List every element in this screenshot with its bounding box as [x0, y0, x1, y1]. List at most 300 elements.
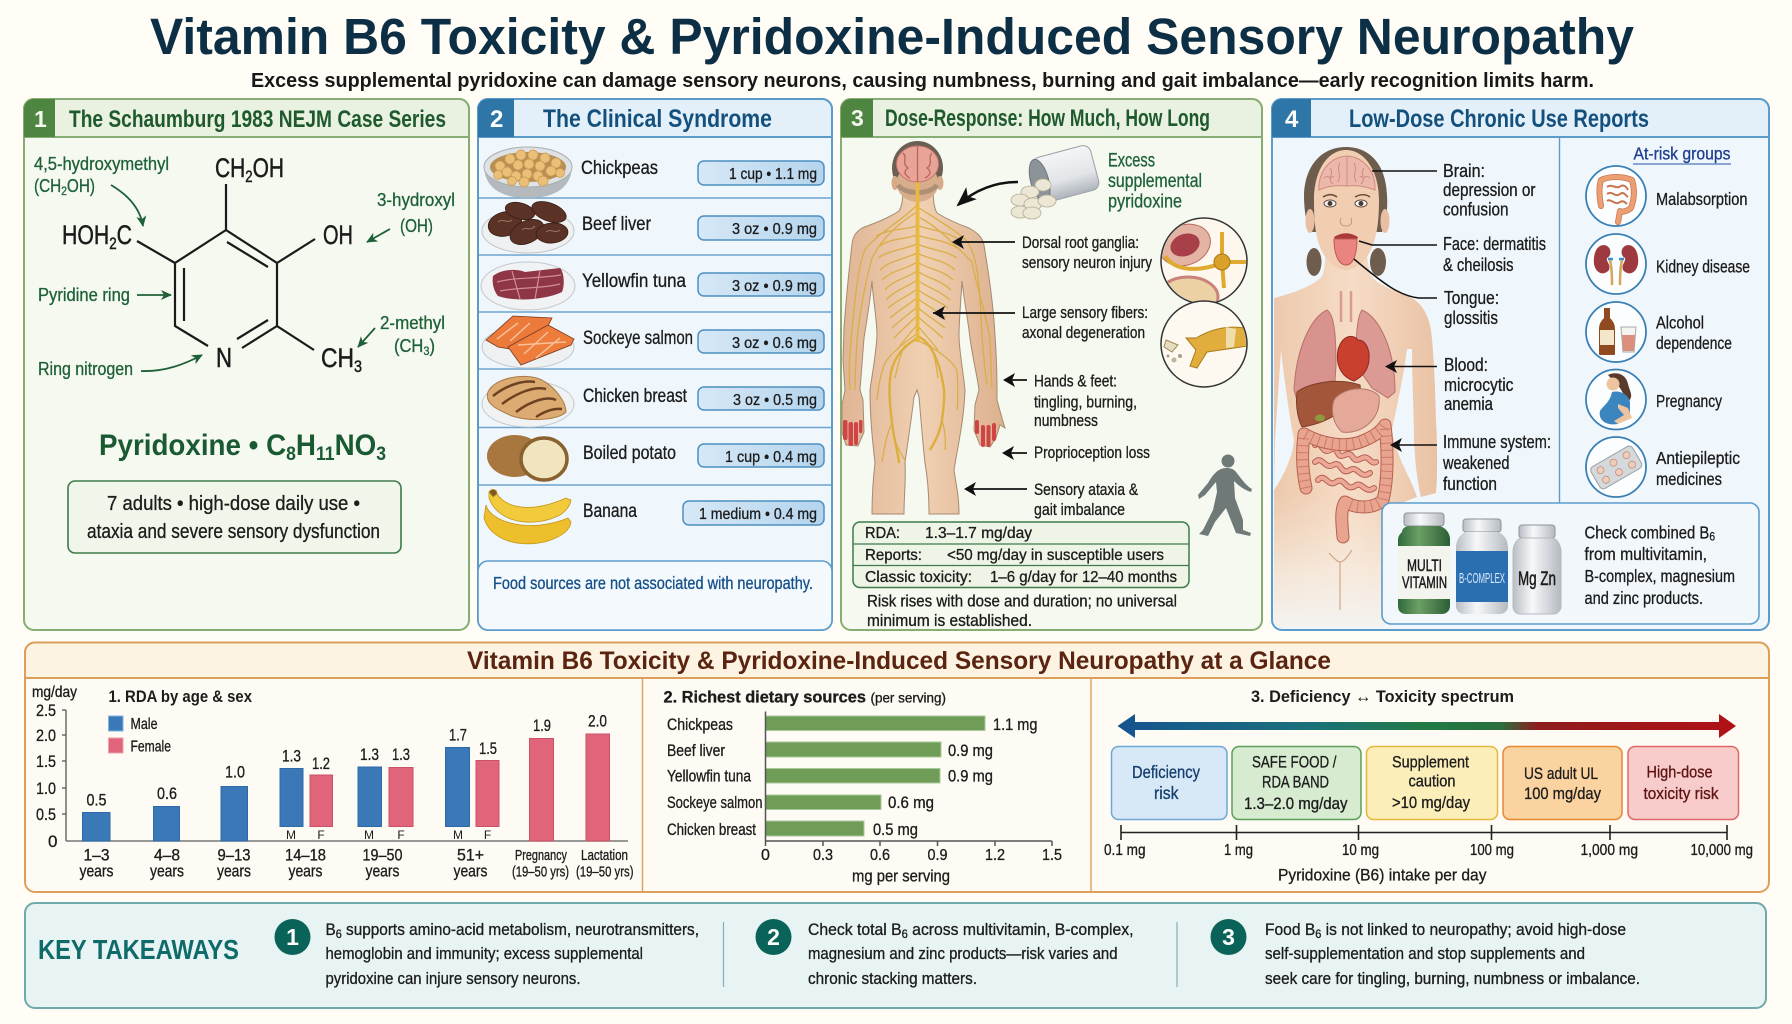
- organ leader: immune system: weakened: [1442, 453, 1510, 473]
- bar values: 2.0: [588, 712, 607, 730]
- takeaway 2: chronic stacking matters.: [808, 969, 977, 988]
- icon: kidneys: [1586, 234, 1646, 294]
- pyridoxine structural formula: CH: [215, 153, 254, 183]
- icon: salmon fillet plate: [482, 316, 574, 368]
- log dose scale: 100 mg: [1470, 842, 1514, 859]
- icon: intestines: [1586, 166, 1646, 226]
- dose note: minimum is established.: [867, 612, 1032, 630]
- risk label: [1656, 448, 1740, 489]
- at-risk groups heading: At-risk groups: [1634, 144, 1731, 164]
- callout text: B-complex, magnesium: [1584, 566, 1735, 586]
- pyridoxine structural formula: 3: [354, 357, 362, 376]
- chart: deficiency to toxicity spectrum: [1104, 687, 1753, 884]
- supplement stacking callout: [1382, 503, 1759, 624]
- callout text: 6: [1709, 530, 1715, 544]
- icon: spilled pill bottle: [1011, 144, 1101, 219]
- molecular formula: 3: [376, 444, 386, 465]
- x axis labels: [761, 847, 1062, 864]
- x axis labels: 1–3: [84, 846, 110, 864]
- case series callout: 7 adults • high-dose daily use •: [107, 493, 360, 515]
- risk label: Kidney disease: [1656, 256, 1750, 276]
- title: Vitamin B6 Toxicity & Pyridoxine-Induced Sensory Neuropathy: [150, 8, 1635, 65]
- band: US adult UL: US adult UL: [1524, 764, 1598, 783]
- serving pill: [698, 161, 824, 185]
- serving pill: 3 oz • 0.5 mg: [733, 392, 817, 409]
- food name: Banana: [583, 501, 637, 522]
- formula annotations: 3: [423, 344, 430, 358]
- y axis: 1.5: [36, 752, 56, 771]
- formula annotations: 4,5-hydroxymethyl: [34, 154, 169, 174]
- takeaway 2: across multivitamin, B-complex,: [908, 920, 1134, 939]
- panel 4 number badge: [1272, 99, 1311, 137]
- risk label: Malabsorption: [1656, 189, 1748, 209]
- serving pill: [683, 501, 824, 525]
- takeaway 1: B: [326, 920, 337, 939]
- log dose scale: [1104, 825, 1753, 859]
- band: supplement caution: Supplement: [1392, 752, 1469, 772]
- takeaway 3: self-supplementation and stop supplements and: [1265, 944, 1585, 963]
- x axis labels: 19–50: [362, 846, 402, 864]
- M/F tags: M: [453, 828, 463, 842]
- chart: RDA by age and sex: (19–50 yrs): [512, 864, 569, 880]
- serving pill: 3 oz • 0.9 mg: [732, 278, 817, 295]
- key takeaways heading: KEY TAKEAWAYS: [38, 934, 239, 965]
- pyridoxine structural formula: 2: [245, 167, 253, 186]
- callout: large sensory fibers: axonal degeneration: [1022, 323, 1145, 342]
- band: safe food / RDA: 1.3–2.0 mg/day: [1244, 794, 1348, 813]
- organ leader: immune system: [1390, 432, 1551, 494]
- legend: Male: [130, 716, 158, 733]
- panel 1 heading: The Schaumburg 1983 NEJM Case Series: [69, 106, 446, 133]
- callout text: [1584, 522, 1735, 608]
- serving pill: [698, 216, 824, 240]
- M/F tags: F: [484, 828, 491, 842]
- x axis labels: 1.5: [1042, 847, 1062, 864]
- chart title: 1. RDA by age & sex: [108, 687, 252, 706]
- y axis: 2.5: [36, 701, 56, 720]
- bar values: [86, 712, 607, 810]
- dose table: [853, 522, 1189, 588]
- x axis labels: 0: [761, 847, 770, 864]
- panel 3 number badge: [841, 99, 873, 137]
- panel 4 heading: Low-Dose Chronic Use Reports: [1349, 105, 1649, 133]
- risk label: Pregnancy: [1656, 391, 1722, 411]
- log dose scale: 10 mg: [1342, 842, 1379, 859]
- bar values: 1.1 mg: [993, 716, 1038, 734]
- organ leader: blood: anemia: [1444, 394, 1494, 414]
- bar values: 0.9 mg: [948, 768, 993, 786]
- band: supplement caution: >10 mg/day: [1392, 793, 1470, 812]
- x axis title: mg per serving: [852, 866, 950, 886]
- callout text: and zinc products.: [1584, 588, 1703, 608]
- x axis labels: years: [366, 862, 400, 880]
- chart: RDA by age and sex: Lactation: [581, 847, 628, 864]
- callout: dorsal root ganglia: sensory neuron injury: [1022, 253, 1152, 272]
- callout: hands and feet: tingling, burning,: [1034, 392, 1137, 412]
- bar values: 0.9 mg: [948, 742, 993, 760]
- formula annotations: (OH): [400, 216, 433, 236]
- callout text: from multivitamin,: [1584, 544, 1707, 564]
- callout: sensory ataxia: [964, 480, 1139, 519]
- inset: ganglion: [1160, 217, 1248, 302]
- food row: yellowfin tuna: [481, 262, 824, 310]
- callout: sensory ataxia: gait imbalance: [1034, 500, 1125, 519]
- band: supplement caution: caution: [1408, 772, 1456, 790]
- risk label: Alcohol: [1656, 312, 1704, 332]
- organ leader: face: & cheilosis: [1443, 255, 1514, 275]
- x axis labels: [80, 846, 488, 880]
- y axis: [32, 684, 77, 851]
- panel 2 number badge: 2: [490, 106, 503, 133]
- chart: RDA by age and sex: (19–50 yrs): [576, 864, 634, 880]
- takeaway 3: 3: [1222, 924, 1235, 950]
- formula annotations: (CH: [394, 336, 426, 356]
- food name: Sockeye salmon: [583, 328, 693, 349]
- formula annotations: (CH: [34, 176, 66, 196]
- panel 3: dose-response: [841, 99, 1262, 630]
- legend: Female: [130, 738, 171, 756]
- risk group: pregnancy: [1586, 370, 1722, 430]
- food name: Yellowfin tuna: [582, 271, 686, 292]
- x axis labels: 4–8: [154, 846, 180, 864]
- icon: unsteady walker silhouette: [1198, 454, 1252, 536]
- callout: hands and feet: [1003, 372, 1137, 430]
- serving pill: 1 medium • 0.4 mg: [699, 506, 817, 523]
- molecular formula: 11: [316, 444, 335, 465]
- takeaway 2: 2: [767, 924, 780, 950]
- callout text: Check combined B: [1584, 522, 1731, 542]
- takeaway 1: hemoglobin and immunity; excess supplemental: [326, 944, 643, 963]
- panel 2: clinical syndrome foods: [478, 99, 832, 630]
- food safety note: [478, 561, 832, 630]
- panel 1: Schaumburg case series: [24, 99, 469, 630]
- x axis labels: years: [288, 862, 322, 880]
- formula annotations: Ring nitrogen: [38, 359, 133, 379]
- legend: [108, 716, 171, 756]
- food row: chickpeas: [484, 147, 824, 198]
- callout: sensory ataxia: Sensory ataxia &: [1034, 480, 1139, 499]
- bar values: 1.3: [282, 746, 301, 766]
- takeaway 3: seek care for tingling, burning, numbness or imbalance.: [1265, 969, 1640, 988]
- food row: beef liver: [482, 197, 824, 253]
- icon: magnesium zinc bottle: Mg Zn: [1518, 569, 1556, 590]
- icon: B-complex bottle: B-COMPLEX: [1459, 570, 1505, 587]
- bar values: 1.9: [533, 716, 551, 735]
- organ leader: tongue: glossitis: [1444, 308, 1498, 328]
- band: safe food / RDA: [1232, 746, 1361, 820]
- takeaway 3: [1210, 919, 1640, 988]
- callout: hands and feet: numbness: [1034, 411, 1098, 430]
- x axis labels: 9–13: [218, 846, 250, 864]
- pyridoxine structural formula: [62, 153, 362, 376]
- takeaway 2: 6: [902, 927, 908, 941]
- organ leader: face: [1359, 234, 1546, 275]
- panel 1 number badge: [24, 99, 55, 137]
- chart: RDA by age and sex: Pregnancy: [515, 847, 567, 864]
- takeaway 1: supports amino-acid metabolism, neurotransmitters,: [342, 920, 699, 939]
- label: excess supplemental pyridoxine: pyridoxine: [1108, 192, 1182, 212]
- M/F tags: F: [317, 828, 325, 842]
- icon: B-complex bottle: [1456, 519, 1508, 614]
- band: safe food / RDA: RDA BAND: [1262, 772, 1329, 792]
- x axis labels: 1.2: [985, 847, 1005, 864]
- x axis labels: 14–18: [285, 846, 326, 864]
- pyridoxine structural formula: C: [117, 220, 132, 250]
- chart title: 3. Deficiency ↔ Toxicity spectrum: [1251, 687, 1514, 706]
- scale title: Pyridoxine (B6) intake per day: [1278, 866, 1487, 884]
- food name: Chickpeas: [581, 158, 658, 179]
- organ leader: blood: microcytic: [1444, 375, 1514, 395]
- panel: at a glance: [25, 642, 1769, 892]
- risk group: kidney disease: [1586, 234, 1750, 294]
- pyridoxine structural formula: N: [216, 342, 232, 373]
- dose table: 1–6 g/day for 12–40 months: [990, 569, 1177, 586]
- panel: key takeaways: [25, 903, 1766, 1008]
- food safety note: Food sources are not associated with neuropathy.: [493, 573, 813, 593]
- x axis labels: 0.9: [928, 847, 948, 864]
- icon: chickpeas bowl: [484, 147, 572, 198]
- risk group: alcohol dependence: [1586, 302, 1732, 362]
- log dose scale: 10,000 mg: [1690, 842, 1753, 859]
- pyridoxine structural formula: HOH: [62, 220, 122, 250]
- serving pill: [698, 273, 824, 296]
- pyridoxine structural formula: OH: [323, 220, 353, 250]
- panel 1 number badge: 1: [34, 106, 47, 132]
- y axis: mg/day: [32, 684, 77, 701]
- serving pill: 3 oz • 0.9 mg: [732, 221, 817, 238]
- icon: blister pack: [1586, 437, 1646, 497]
- label: excess supplemental pyridoxine: supplemental: [1108, 171, 1202, 192]
- subtitle: Excess supplemental pyridoxine can damage sensory neurons, causing numbness, burning and gait imbalance—early recognition limits harm.: [251, 70, 1594, 92]
- case series callout: [68, 481, 401, 553]
- bar values: 1.5: [479, 739, 497, 758]
- band: supplement caution: [1366, 746, 1498, 820]
- dose table: RDA:: [865, 525, 900, 542]
- food name: Boiled potato: [583, 443, 676, 464]
- band: safe food / RDA: SAFE FOOD /: [1252, 752, 1337, 772]
- takeaway 1: 1: [286, 924, 299, 950]
- dose table: <50 mg/day in susceptible users: [947, 547, 1164, 564]
- dose table: 1.3–1.7 mg/day: [925, 525, 1032, 542]
- panel 2 number badge: [478, 99, 514, 137]
- takeaway 1: [274, 919, 699, 988]
- icon: multivitamin bottle: MULTI: [1407, 556, 1442, 575]
- callout: large sensory fibers: Large sensory fibers:: [1022, 303, 1148, 322]
- food name: Chicken breast: [583, 386, 688, 407]
- organ leader: face: Face: dermatitis: [1443, 234, 1546, 254]
- icon: bottle and glass: [1586, 302, 1646, 362]
- bar values: 0.6 mg: [888, 794, 934, 812]
- food labels: [667, 716, 762, 839]
- dose table: Reports:: [865, 547, 922, 564]
- bar values: 0.5 mg: [873, 821, 918, 839]
- bar values: 1.3: [360, 745, 379, 764]
- panel 4: low-dose chronic use: [1268, 99, 1769, 630]
- formula annotations: Pyridine ring: [38, 285, 130, 305]
- food labels: Beef liver: [667, 742, 725, 760]
- risk label: [1656, 312, 1732, 353]
- bar values: 1.2: [312, 754, 330, 773]
- chart: richest dietary sources: [664, 688, 1062, 886]
- panel 2 heading: The Clinical Syndrome: [543, 105, 772, 133]
- food name: Beef liver: [582, 214, 652, 235]
- y axis: 0: [48, 832, 57, 851]
- M/F tags: M: [364, 828, 374, 842]
- dose table: Classic toxicity:: [865, 569, 972, 586]
- panel 3 number badge: 3: [851, 105, 864, 131]
- icon: multivitamin bottle: VITAMIN: [1402, 573, 1447, 592]
- bar values: 0.5: [86, 790, 106, 810]
- icon: multivitamin bottle: [1398, 513, 1450, 614]
- M/F tags: [286, 828, 491, 842]
- organ leader: brain: Brain:: [1443, 161, 1485, 181]
- horizontal bars: [766, 716, 985, 836]
- x axis labels: years: [150, 862, 184, 880]
- illustration: male back with nerves: [842, 141, 1005, 514]
- callout: proprioception loss: [1002, 443, 1150, 462]
- molecular formula: Pyridoxine • C: [99, 429, 301, 462]
- band: deficiency risk: Deficiency: [1132, 762, 1200, 782]
- formula annotations: 3-hydroxyl: [377, 190, 455, 210]
- serving pill: [698, 444, 824, 467]
- chart title: 2. Richest dietary sources (per serving): [664, 688, 946, 706]
- x axis labels: 0.6: [870, 847, 890, 864]
- organ leader: immune system: Immune system:: [1443, 432, 1551, 452]
- band: high-dose toxicity: [1628, 746, 1738, 820]
- takeaway 3: is not linked to neuropathy; avoid high-dose: [1321, 920, 1626, 939]
- pyridoxine structural formula: 2: [109, 234, 117, 253]
- double-headed spectrum arrow: [1118, 714, 1736, 738]
- risk label: Antiepileptic: [1656, 448, 1740, 468]
- food row: sockeye salmon: [482, 316, 824, 368]
- label: excess supplemental pyridoxine: [1108, 150, 1202, 212]
- icon: potato: [487, 435, 567, 480]
- icon: beef liver plate: [482, 197, 574, 253]
- icon: tuna steak plate: [481, 262, 575, 310]
- formula annotations: 2: [61, 184, 67, 198]
- x axis labels: years: [454, 862, 488, 880]
- band: US adult UL: [1503, 746, 1622, 820]
- icon: pregnant woman: [1586, 370, 1646, 430]
- food labels: Yellowfin tuna: [667, 768, 752, 786]
- takeaway 3: Food B: [1265, 920, 1320, 939]
- food labels: Sockeye salmon: [667, 794, 762, 812]
- panel 4 number badge: 4: [1285, 106, 1299, 133]
- molecular formula: 8: [286, 444, 296, 465]
- band: deficiency risk: risk: [1154, 783, 1179, 803]
- M/F tags: M: [286, 828, 296, 842]
- risk group: malabsorption: [1586, 166, 1748, 226]
- organ leader: brain: confusion: [1443, 200, 1508, 220]
- formula annotations: 2-methyl: [380, 313, 445, 333]
- log dose scale: 1,000 mg: [1580, 842, 1638, 859]
- risk label: medicines: [1656, 469, 1722, 489]
- icon: bananas: [484, 490, 571, 544]
- risk group: antiepileptic medicines: [1586, 437, 1740, 497]
- takeaway 2: magnesium and zinc products—risk varies and: [808, 944, 1118, 963]
- arrow: pills to body: [958, 182, 1018, 205]
- dose note: [867, 592, 1177, 630]
- callout: proprioception loss: Proprioception loss: [1034, 443, 1150, 462]
- organ leader: tongue: Tongue:: [1444, 288, 1499, 308]
- illustration: female anatomy: [1268, 147, 1437, 630]
- chart: RDA by age and sex: [32, 684, 634, 880]
- organ leader: tongue: [1354, 259, 1499, 328]
- panel 3 heading: Dose-Response: How Much, How Long: [885, 105, 1210, 132]
- icon: magnesium zinc bottle: [1513, 525, 1561, 614]
- x axis labels: years: [80, 862, 114, 880]
- serving pill: 1 cup • 1.1 mg: [729, 166, 817, 183]
- y axis: 1.0: [36, 779, 56, 798]
- at a glance heading: Vitamin B6 Toxicity & Pyridoxine-Induced Sensory Neuropathy at a Glance: [467, 647, 1331, 675]
- M/F tags: F: [397, 828, 405, 842]
- risk label: dependence: [1656, 333, 1732, 353]
- band: high-dose toxicity: toxicity risk: [1644, 784, 1719, 803]
- organ leader: blood: Blood:: [1444, 355, 1488, 375]
- log dose scale: 1 mg: [1224, 842, 1253, 859]
- inset: axon degeneration: [1161, 301, 1248, 387]
- callout: large sensory fibers: [933, 303, 1148, 342]
- serving pill: [698, 387, 824, 410]
- food labels: Chicken breast: [667, 821, 756, 839]
- pyridoxine structural formula: CH: [321, 343, 360, 373]
- organ leader: immune system: function: [1443, 474, 1497, 494]
- food row: banana: [484, 490, 824, 544]
- pyridoxine structural formula: OH: [253, 153, 284, 183]
- takeaway 3: 6: [1315, 927, 1322, 941]
- formula annotations: [34, 154, 455, 379]
- takeaway 1: 6: [336, 927, 342, 941]
- bar values: 1.3: [392, 745, 410, 764]
- bar values: 1.0: [225, 762, 245, 782]
- callout: dorsal root ganglia: [952, 233, 1152, 272]
- organ leader: blood: [1385, 355, 1514, 414]
- formula annotations: OH): [67, 176, 95, 196]
- organ leader: brain: [1372, 161, 1536, 220]
- molecular formula: H: [296, 429, 316, 462]
- takeaway 1: pyridoxine can injure sensory neurons.: [326, 969, 580, 988]
- band: US adult UL: 100 mg/day: [1524, 784, 1601, 803]
- callout: dorsal root ganglia: Dorsal root ganglia:: [1022, 233, 1139, 252]
- food row: chicken breast: [482, 376, 824, 427]
- formula annotations: ): [429, 336, 435, 356]
- takeaway 2: Check total B: [808, 920, 909, 939]
- icon: grilled chicken plate: [482, 376, 574, 427]
- takeaway 2: [756, 919, 1134, 988]
- bars: [82, 748, 470, 841]
- dose note: Risk rises with dose and duration; no universal: [867, 592, 1177, 610]
- bar values: 1.7: [449, 726, 467, 744]
- food row: boiled potato: [487, 435, 824, 480]
- band: deficiency risk: [1112, 746, 1227, 820]
- y axis: 0.5: [36, 805, 56, 824]
- serving pill: [698, 330, 824, 353]
- x axis labels: 51+: [457, 846, 484, 864]
- log dose scale: 0.1 mg: [1104, 842, 1146, 859]
- food labels: Chickpeas: [667, 716, 733, 734]
- organ leader: brain: depression or: [1443, 180, 1536, 200]
- x axis labels: 0.3: [813, 847, 833, 864]
- case series callout: ataxia and severe sensory dysfunction: [87, 521, 380, 543]
- band: high-dose toxicity: High-dose: [1646, 762, 1712, 782]
- serving pill: 1 cup • 0.4 mg: [725, 449, 817, 466]
- x axis labels: years: [217, 862, 251, 880]
- label: excess supplemental pyridoxine: Excess: [1108, 150, 1155, 172]
- serving pill: 3 oz • 0.6 mg: [732, 335, 817, 352]
- molecular formula: NO: [335, 429, 376, 462]
- y axis: 2.0: [36, 726, 56, 745]
- callout: hands and feet: Hands & feet:: [1034, 372, 1117, 390]
